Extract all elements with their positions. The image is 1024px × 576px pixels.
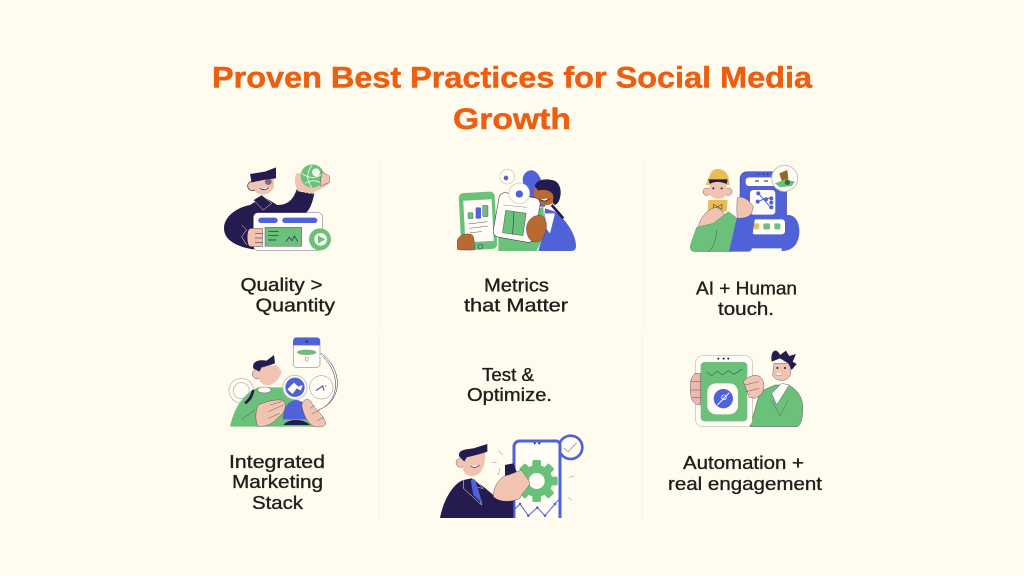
- title: [212, 61, 812, 136]
- label: Automation + real engagement: [668, 452, 822, 494]
- icon: man holding globe and video card: [224, 164, 331, 250]
- label: Test & Optimize.: Optimize.: [467, 384, 552, 405]
- panel: metrics that matter: [457, 169, 576, 316]
- icon: man adjusting gear on phone: [440, 436, 582, 518]
- label: Integrated Marketing Stack: [229, 451, 325, 513]
- title: Proven Best Practices for Social Media: [212, 61, 812, 94]
- label: AI + Human touch.: touch.: [718, 298, 774, 319]
- panel: test and optimize: [440, 364, 582, 518]
- label: Metrics that Matter: that Matter: [464, 294, 568, 316]
- label: Test & Optimize.: [467, 364, 552, 405]
- label: Integrated Marketing Stack: Integrated: [229, 451, 325, 472]
- panel: automation and real engagement: [668, 351, 822, 494]
- label: Quality > Quantity: [240, 274, 336, 316]
- label: Metrics that Matter: [464, 274, 568, 316]
- title: Growth: [453, 103, 571, 136]
- label: Quality > Quantity: Quantity: [256, 294, 336, 316]
- panel: integrated marketing stack: [229, 338, 337, 513]
- label: Integrated Marketing Stack: Stack: [252, 492, 304, 513]
- icon: woman with tablet and chart card: [457, 169, 576, 251]
- label: AI + Human touch.: AI + Human: [696, 278, 797, 298]
- label: AI + Human touch.: [696, 278, 797, 319]
- label: Metrics that Matter: Metrics: [484, 274, 549, 296]
- panel: AI + Human touch: [690, 165, 799, 319]
- icon: person with phone and avatar: [690, 165, 799, 252]
- label: Quality > Quantity: Quality >: [240, 274, 322, 295]
- label: Automation + real engagement: Automation +: [683, 452, 804, 473]
- icon: man holding tablet with app: [690, 351, 803, 427]
- icon: man with connected app circles: [229, 338, 337, 427]
- panel: quality over quantity: [224, 164, 336, 316]
- label: Test & Optimize.: Test &: [482, 364, 535, 385]
- label: Automation + real engagement: real engagement: [668, 473, 822, 494]
- label: Integrated Marketing Stack: Marketing: [232, 471, 323, 492]
